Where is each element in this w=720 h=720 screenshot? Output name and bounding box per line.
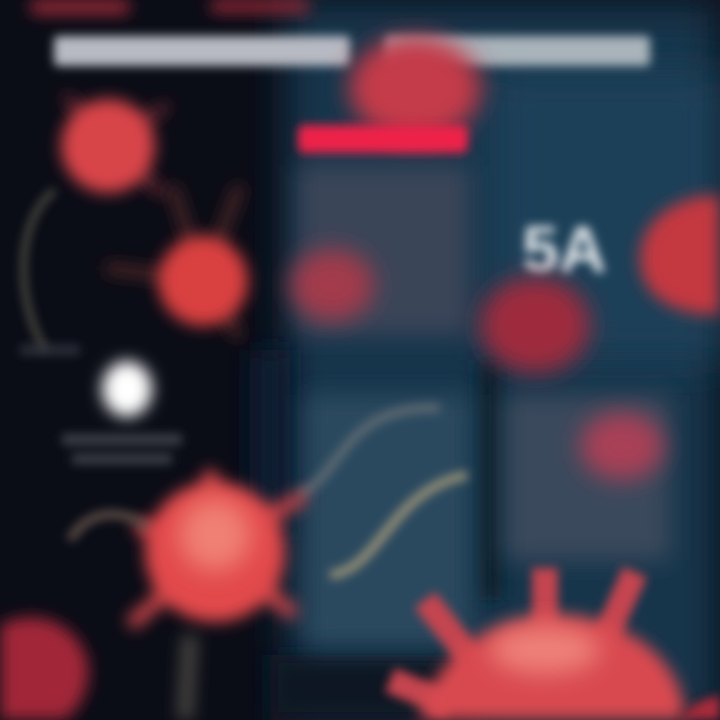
curved line: left [24,190,55,350]
header virus and red banner [298,36,481,153]
small text block [20,345,182,464]
virus: bottom right [390,568,720,720]
title bar [54,36,650,66]
panel: upper centre [298,165,470,335]
panel: lower centre chart [305,395,470,645]
big number: 5A [522,212,606,286]
virus: upper left [61,95,168,195]
panel: lower right [505,395,670,560]
virus: large lower left [70,470,305,720]
virus: bottom left [0,617,89,720]
virus: middle left [105,185,248,338]
line chart curves [300,408,467,575]
virus: lower right panel [580,412,664,480]
virus: centre right [480,277,590,373]
virus: large right [640,195,720,315]
top edge red shapes [30,0,310,14]
icon: white badge [102,361,152,417]
virus: upper centre panel [290,249,374,321]
